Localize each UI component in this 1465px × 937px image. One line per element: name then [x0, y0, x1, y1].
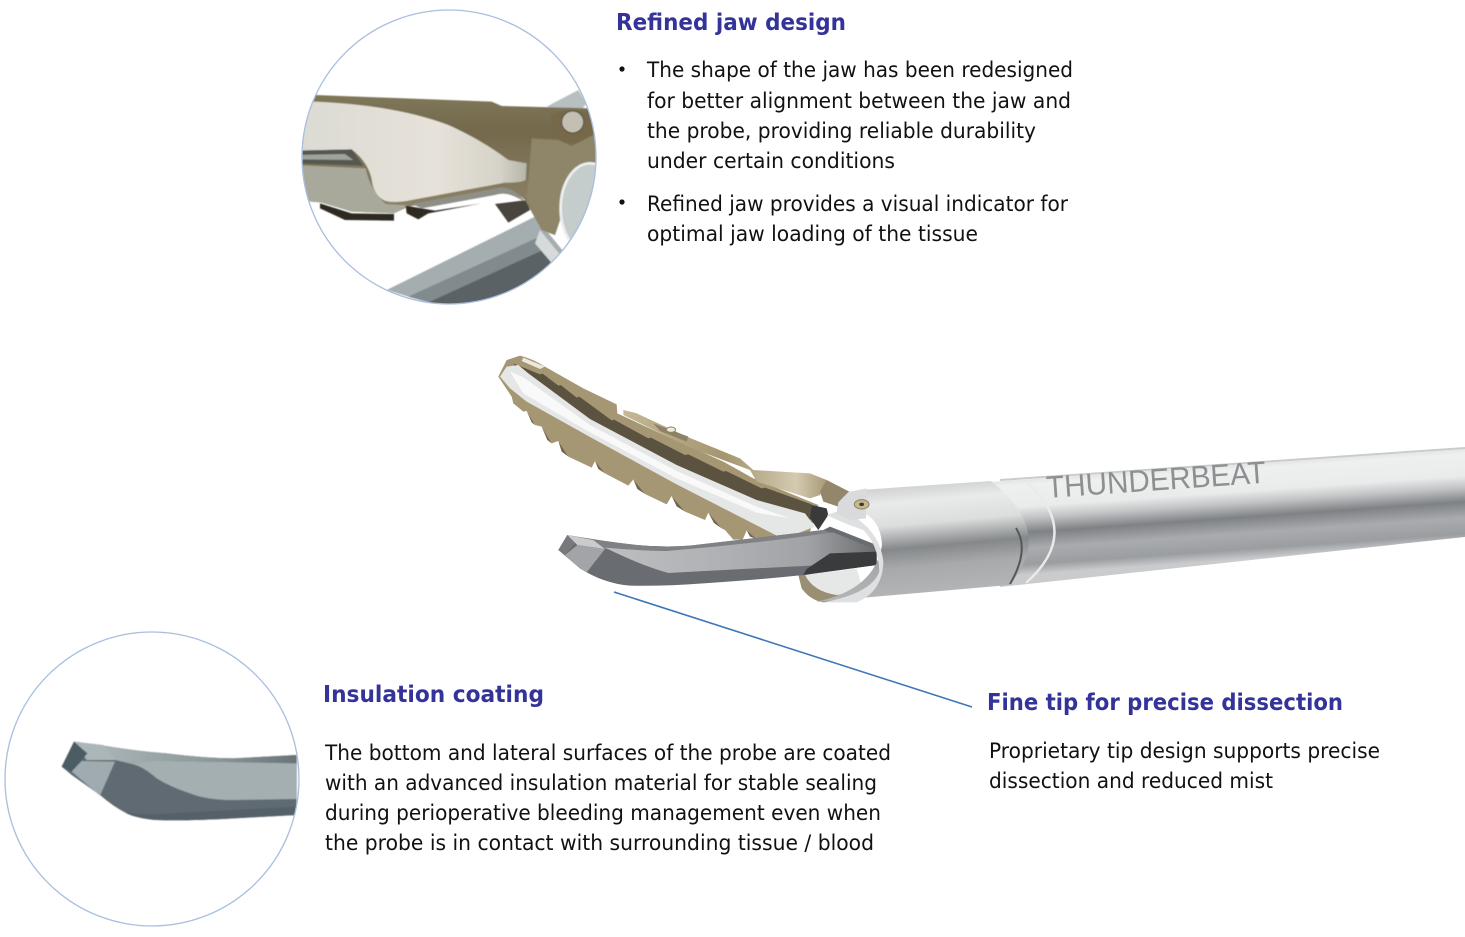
text block: insulation coating description: the probe is in contact with surrounding tissue / blood: [325, 831, 874, 855]
text block: insulation coating description: during perioperative bleeding management even when: [325, 801, 881, 825]
text block: insulation coating description: The bottom and lateral surfaces of the probe are coated: [324, 741, 891, 765]
shaft lettering: THUNDERBEAT: [1045, 455, 1267, 505]
circle outline: [5, 632, 299, 926]
text block: fine tip description: dissection and reduced mist: [989, 769, 1273, 793]
text block: insulation coating description: with an advanced insulation material for stable sealing: [325, 771, 877, 795]
circle outline: [302, 10, 596, 304]
text block: insulation coating description: [324, 741, 891, 855]
panel: refined jaw design magnified circle: [295, 10, 619, 310]
upper jaw: [498, 356, 849, 540]
lower jaw piece: [798, 568, 863, 602]
collar groove: [1010, 528, 1022, 584]
heading: refined jaw design: Refined jaw design: [616, 10, 846, 36]
panel: insulation coating magnified circle: [5, 632, 299, 926]
text block: refined jaw design bullets: Refined jaw provides a visual indicator for: [647, 192, 1068, 216]
callout line: fine tip: [614, 592, 972, 707]
text block: refined jaw design bullets: for better alignment between the jaw and: [647, 89, 1071, 113]
front tube: [815, 481, 1029, 602]
tube lip: [823, 488, 883, 602]
text block: refined jaw design bullets: [619, 58, 1073, 246]
heading: fine tip: Fine tip for precise dissection: [987, 690, 1343, 716]
text block: fine tip description: Proprietary tip design supports precise: [989, 739, 1380, 763]
text block: refined jaw design bullets: under certain conditions: [647, 149, 895, 173]
shaft: [990, 448, 1465, 587]
instrument: main device illustration: [498, 356, 1465, 602]
text block: fine tip description: [989, 739, 1380, 793]
text block: refined jaw design bullets: optimal jaw loading of the tissue: [647, 222, 978, 246]
heading: insulation coating: Insulation coating: [323, 682, 544, 708]
text block: refined jaw design bullets: the probe, providing reliable durability: [647, 119, 1036, 143]
text block: refined jaw design bullets: The shape of the jaw has been redesigned: [646, 58, 1073, 82]
probe: [558, 527, 877, 586]
